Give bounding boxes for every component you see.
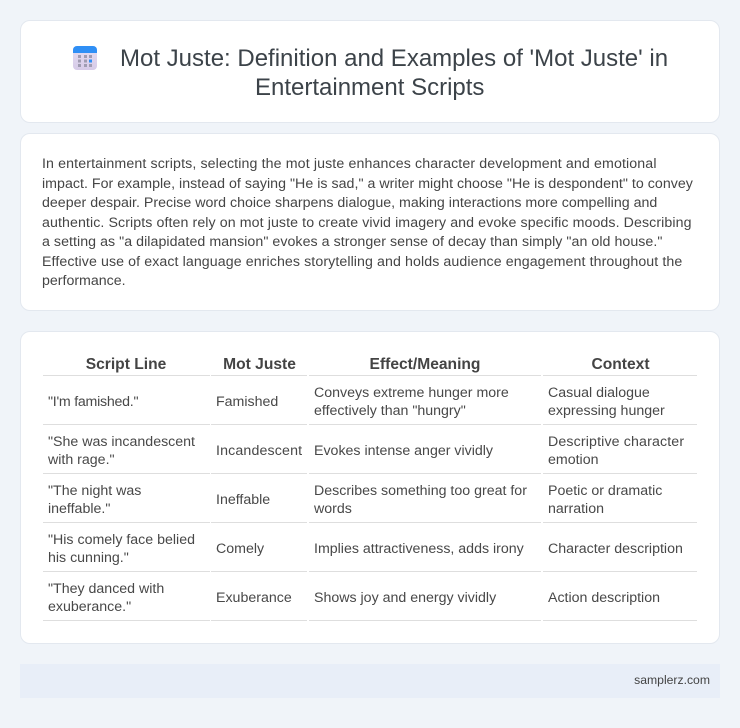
- row 2: Descriptive character: [548, 434, 684, 450]
- row 1: Conveys extreme hunger more: [314, 385, 509, 401]
- row 3: narration: [548, 501, 604, 517]
- row 1: Casual dialogue: [548, 385, 650, 401]
- row 4: his cunning.": [48, 550, 129, 566]
- title: Entertainment Scripts: [255, 74, 484, 101]
- row 4: [48, 532, 683, 566]
- row 2: with rage.": [48, 452, 115, 468]
- row 4: Implies attractiveness, adds irony: [314, 541, 524, 557]
- table header: [86, 356, 650, 373]
- row 1: [48, 385, 665, 419]
- row 2: "She was incandescent: [48, 434, 195, 450]
- row 5: Action description: [548, 590, 660, 606]
- row 2: Evokes intense anger vividly: [314, 443, 493, 459]
- intro text: [42, 156, 693, 289]
- icon: calendar: [73, 46, 97, 70]
- row 5: [48, 581, 660, 615]
- table header: Effect/Meaning: [370, 356, 480, 373]
- row 5: Shows joy and energy vividly: [314, 590, 496, 606]
- table header: Context: [591, 356, 650, 373]
- row 1: Famished: [216, 394, 278, 410]
- row 4: "His comely face belied: [48, 532, 195, 548]
- row 3: ineffable.": [48, 501, 110, 517]
- intro text: Effective use of exact language enriches storytelling and holds audience engagement throughout the: [42, 254, 682, 270]
- row 3: Ineffable: [216, 492, 270, 508]
- intro text: a setting as "a dilapidated mansion" evokes a stronger sense of decay than simply "an old house.": [42, 234, 662, 250]
- row 2: emotion: [548, 452, 598, 468]
- row 3: Describes something too great for: [314, 483, 527, 499]
- row 3: [48, 483, 662, 517]
- row 1: effectively than "hungry": [314, 403, 466, 419]
- row 4: Comely: [216, 541, 264, 557]
- row 3: "The night was: [48, 483, 141, 499]
- row 5: exuberance.": [48, 599, 131, 615]
- row 2: [48, 434, 684, 468]
- intro text: performance.: [42, 273, 126, 289]
- title: Mot Juste: Definition and Examples of 'Mot Juste' in: [120, 45, 668, 72]
- row 4: Character description: [548, 541, 683, 557]
- row 1: expressing hunger: [548, 403, 665, 419]
- row 2: Incandescent: [216, 443, 302, 459]
- row 3: words: [314, 501, 352, 517]
- intro text: In entertainment scripts, selecting the mot juste enhances character development and emotional: [42, 156, 657, 172]
- intro text: deeper despair. Precise word choice sharpens dialogue, making interactions more compelling and: [42, 195, 657, 211]
- title card: [20, 20, 720, 123]
- row 3: Poetic or dramatic: [548, 483, 662, 499]
- table header: Mot Juste: [223, 356, 296, 373]
- intro text: impact. For example, instead of saying "He is sad," a writer might choose "He is despondent" to convey: [42, 176, 693, 192]
- table header: Script Line: [86, 356, 166, 373]
- table card: [20, 331, 720, 644]
- intro paragraph card: [20, 133, 720, 311]
- intro text: authentic. Scripts often rely on mot juste to create vivid imagery and evoke specific moods. Describing: [42, 214, 692, 230]
- footer text: samplerz.com: [634, 673, 710, 687]
- row 5: "They danced with: [48, 581, 164, 597]
- title: [120, 45, 668, 101]
- row 1: "I'm famished.": [48, 394, 138, 410]
- row 5: Exuberance: [216, 590, 292, 606]
- footer bar: [20, 664, 720, 698]
